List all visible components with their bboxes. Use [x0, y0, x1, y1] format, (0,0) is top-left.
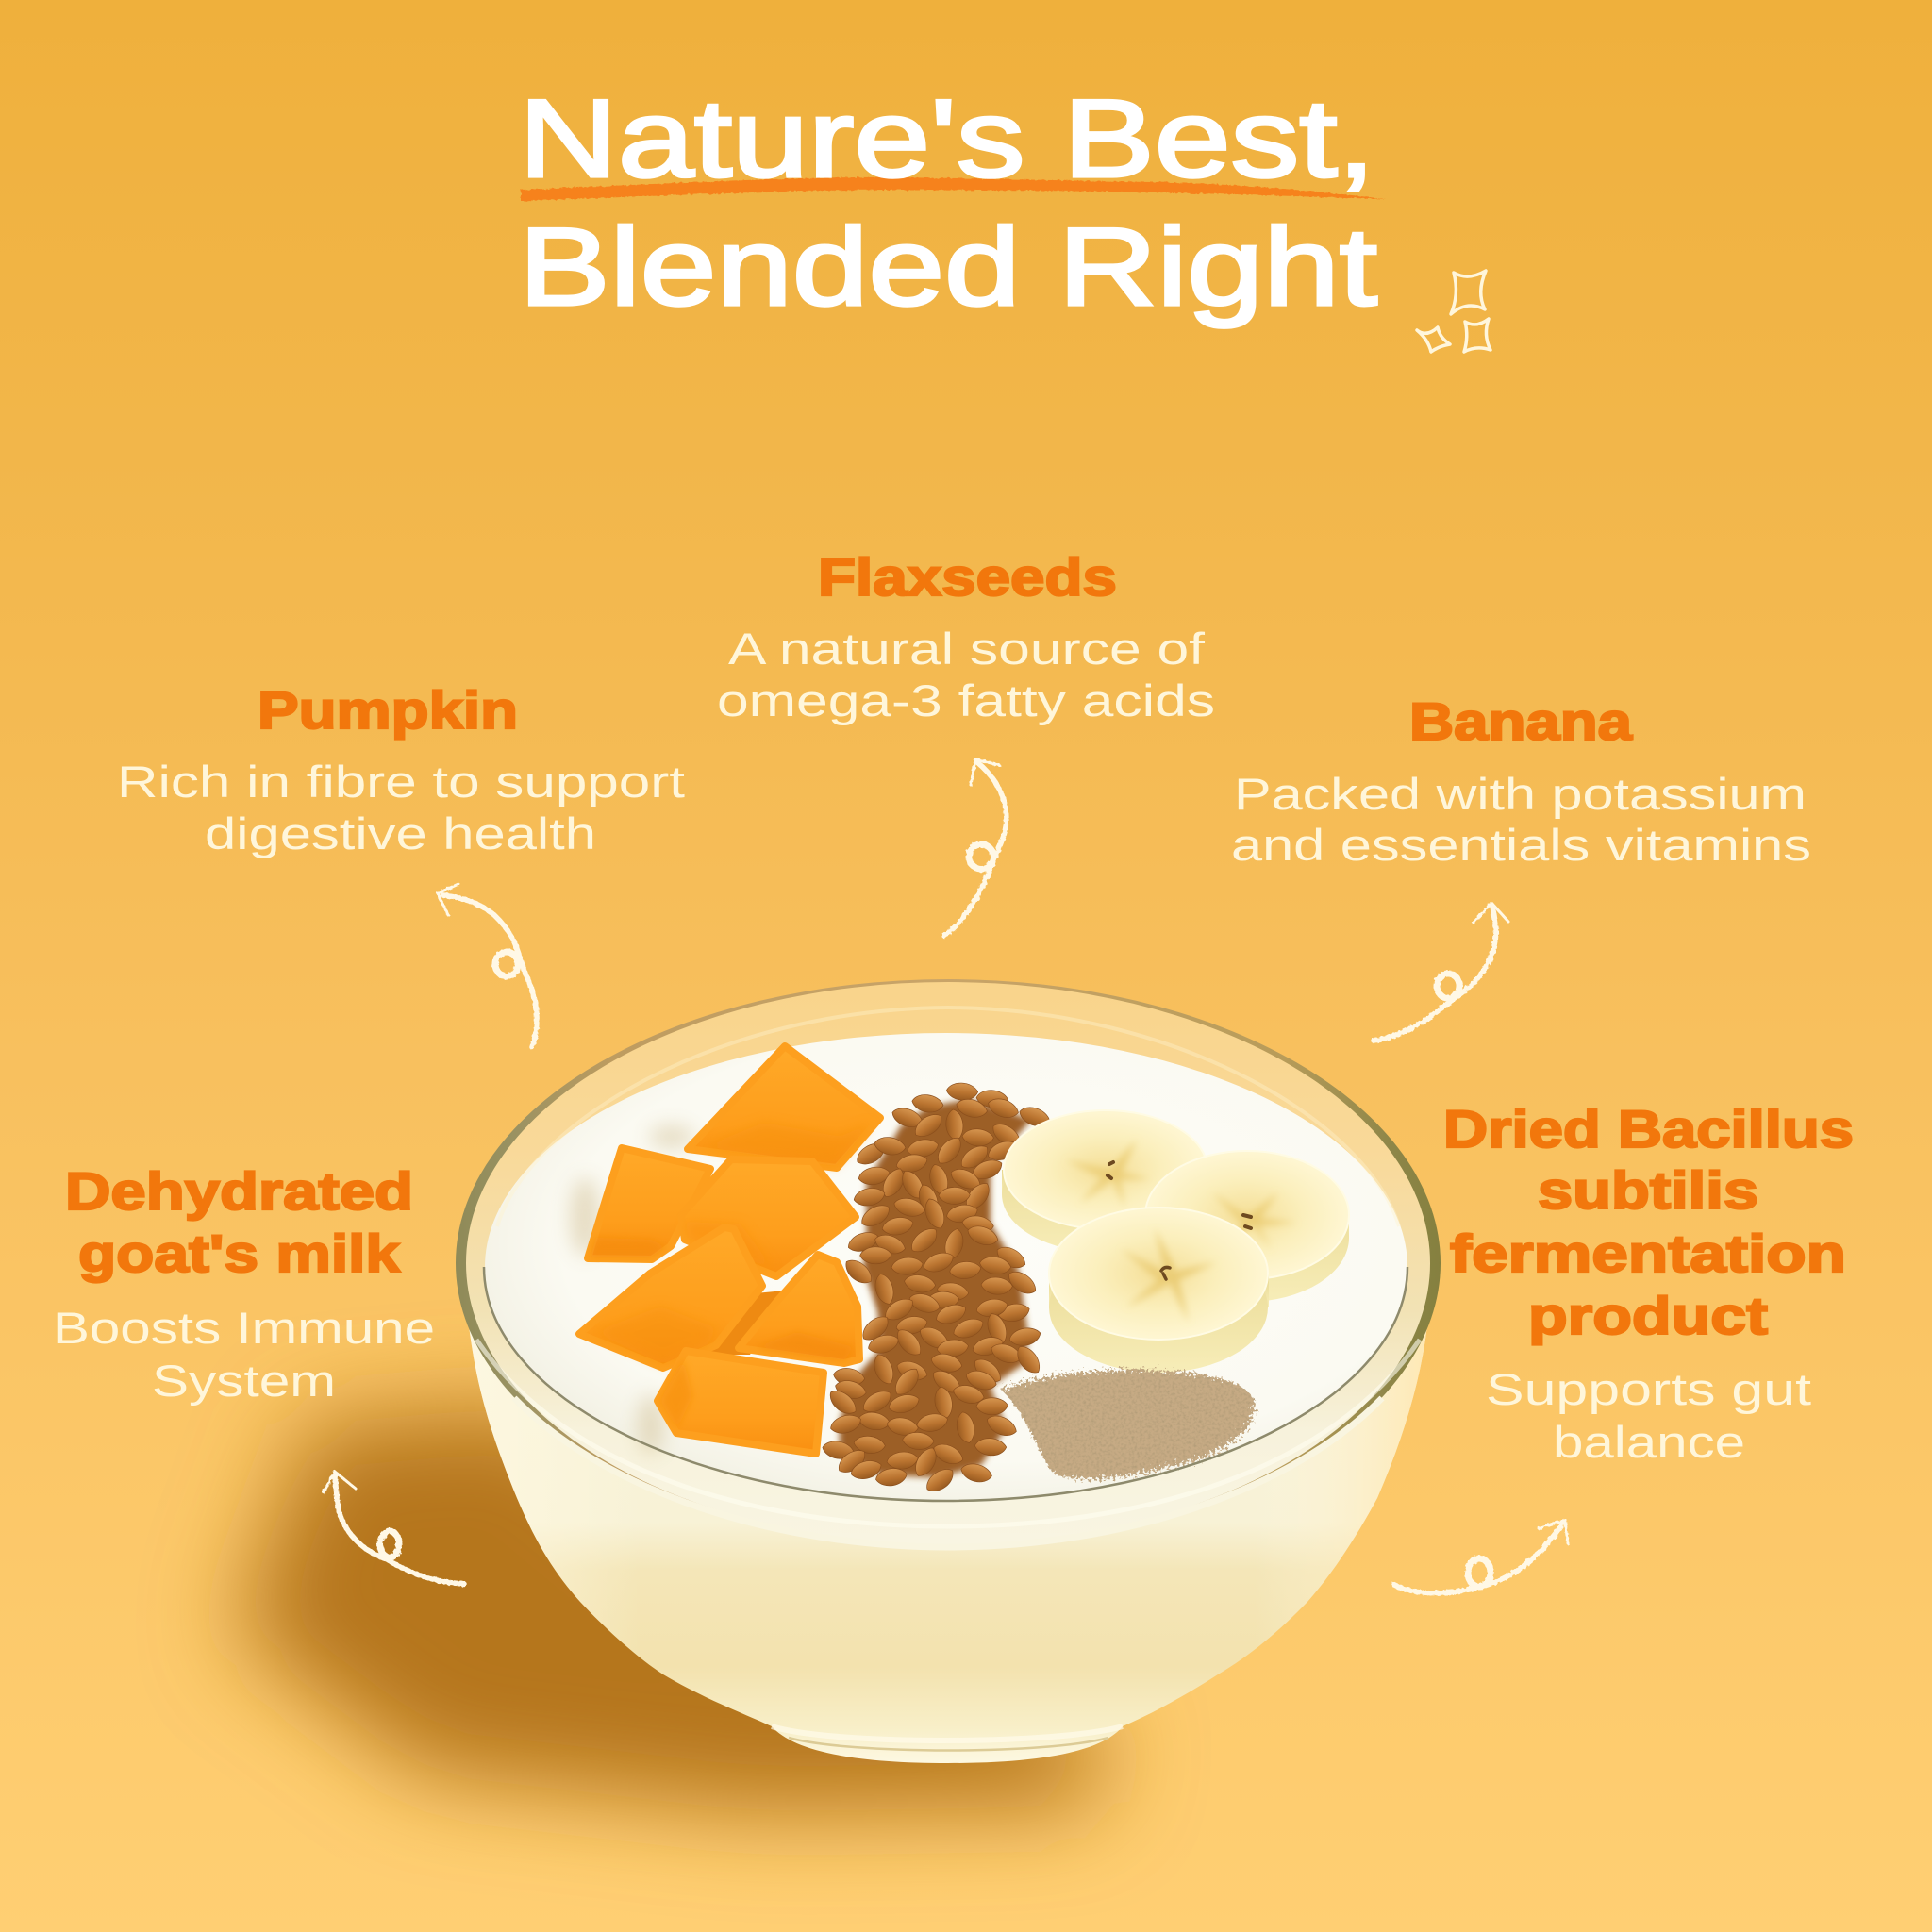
flaxseeds description: A natural source of — [728, 624, 1206, 674]
banana slice: right — [1145, 1151, 1349, 1302]
bowl shadow — [236, 1406, 1113, 1811]
panel: pumpkin label — [117, 680, 685, 858]
bowl body — [469, 1325, 1427, 1763]
title — [519, 76, 1386, 328]
banana heading: Banana — [1409, 691, 1633, 751]
goat's milk description — [53, 1303, 435, 1406]
pumpkin piece: top — [688, 1046, 880, 1168]
banana slice: upper left — [1002, 1110, 1208, 1253]
panel: goat's milk label — [53, 1161, 435, 1406]
flaxseeds description — [717, 624, 1215, 725]
banana description: Packed with potassium — [1234, 769, 1807, 819]
banana description: and essentials vitamins — [1231, 820, 1811, 870]
pumpkin piece: left — [588, 1148, 710, 1259]
bowl — [456, 979, 1441, 1763]
pumpkin shadows — [570, 1125, 694, 1455]
panel: flaxseeds label — [717, 547, 1215, 725]
pumpkin piece: lower left — [579, 1227, 762, 1368]
flaxseeds description: omega-3 fatty acids — [717, 675, 1215, 725]
bacillus heading: product — [1528, 1286, 1768, 1345]
panel: bacillus label — [1443, 1099, 1854, 1467]
glass rim outline — [476, 1008, 1420, 1526]
banana slice: front — [1049, 1208, 1269, 1373]
pumpkin piece: right — [739, 1255, 859, 1363]
arrow: pumpkin — [438, 884, 537, 1047]
arrow: flaxseeds — [944, 759, 1007, 936]
flaxseeds heading: Flaxseeds — [818, 547, 1117, 607]
bacillus powder — [1001, 1370, 1255, 1479]
glass rim — [466, 982, 1430, 1544]
goat's milk description: System — [152, 1356, 336, 1406]
title underline stroke — [521, 177, 1386, 201]
title line 2: Blended Right — [519, 205, 1377, 328]
pumpkin piece: centre — [681, 1159, 856, 1276]
milk surface — [485, 1033, 1407, 1501]
pumpkin description: Rich in fibre to support — [117, 757, 685, 807]
bacillus description: Supports gut — [1486, 1364, 1811, 1414]
icon: sparkles — [1417, 271, 1491, 352]
goat's milk heading — [65, 1161, 413, 1283]
front rim highlight — [514, 1398, 1382, 1547]
banana slices — [1002, 1110, 1349, 1373]
panel: banana label — [1231, 691, 1811, 870]
arrow: banana — [1374, 903, 1508, 1041]
title line 1: Nature's Best, — [519, 76, 1375, 200]
pumpkin heading: Pumpkin — [258, 680, 518, 740]
banana description — [1231, 769, 1811, 870]
bacillus description — [1486, 1364, 1811, 1467]
pumpkin description — [117, 757, 685, 858]
arrow: goat's milk — [324, 1472, 464, 1584]
pumpkin pieces — [579, 1046, 880, 1454]
pumpkin gap shade — [703, 1291, 785, 1355]
pumpkin description: digestive health — [205, 808, 596, 858]
goat's milk heading: goat's milk — [78, 1224, 401, 1283]
arrow: bacillus — [1394, 1520, 1568, 1593]
bacillus heading: Dried Bacillus — [1443, 1099, 1854, 1158]
flaxseeds — [821, 1082, 1052, 1496]
pumpkin piece: bottom — [658, 1351, 824, 1454]
bacillus heading — [1443, 1099, 1854, 1345]
bacillus heading: subtilis — [1538, 1160, 1758, 1220]
glass rim side bands — [456, 979, 1441, 1547]
goat's milk heading: Dehydrated — [65, 1161, 413, 1221]
goat's milk description: Boosts Immune — [53, 1303, 435, 1353]
bacillus description: balance — [1553, 1417, 1745, 1467]
bacillus heading: fermentation — [1450, 1224, 1846, 1283]
